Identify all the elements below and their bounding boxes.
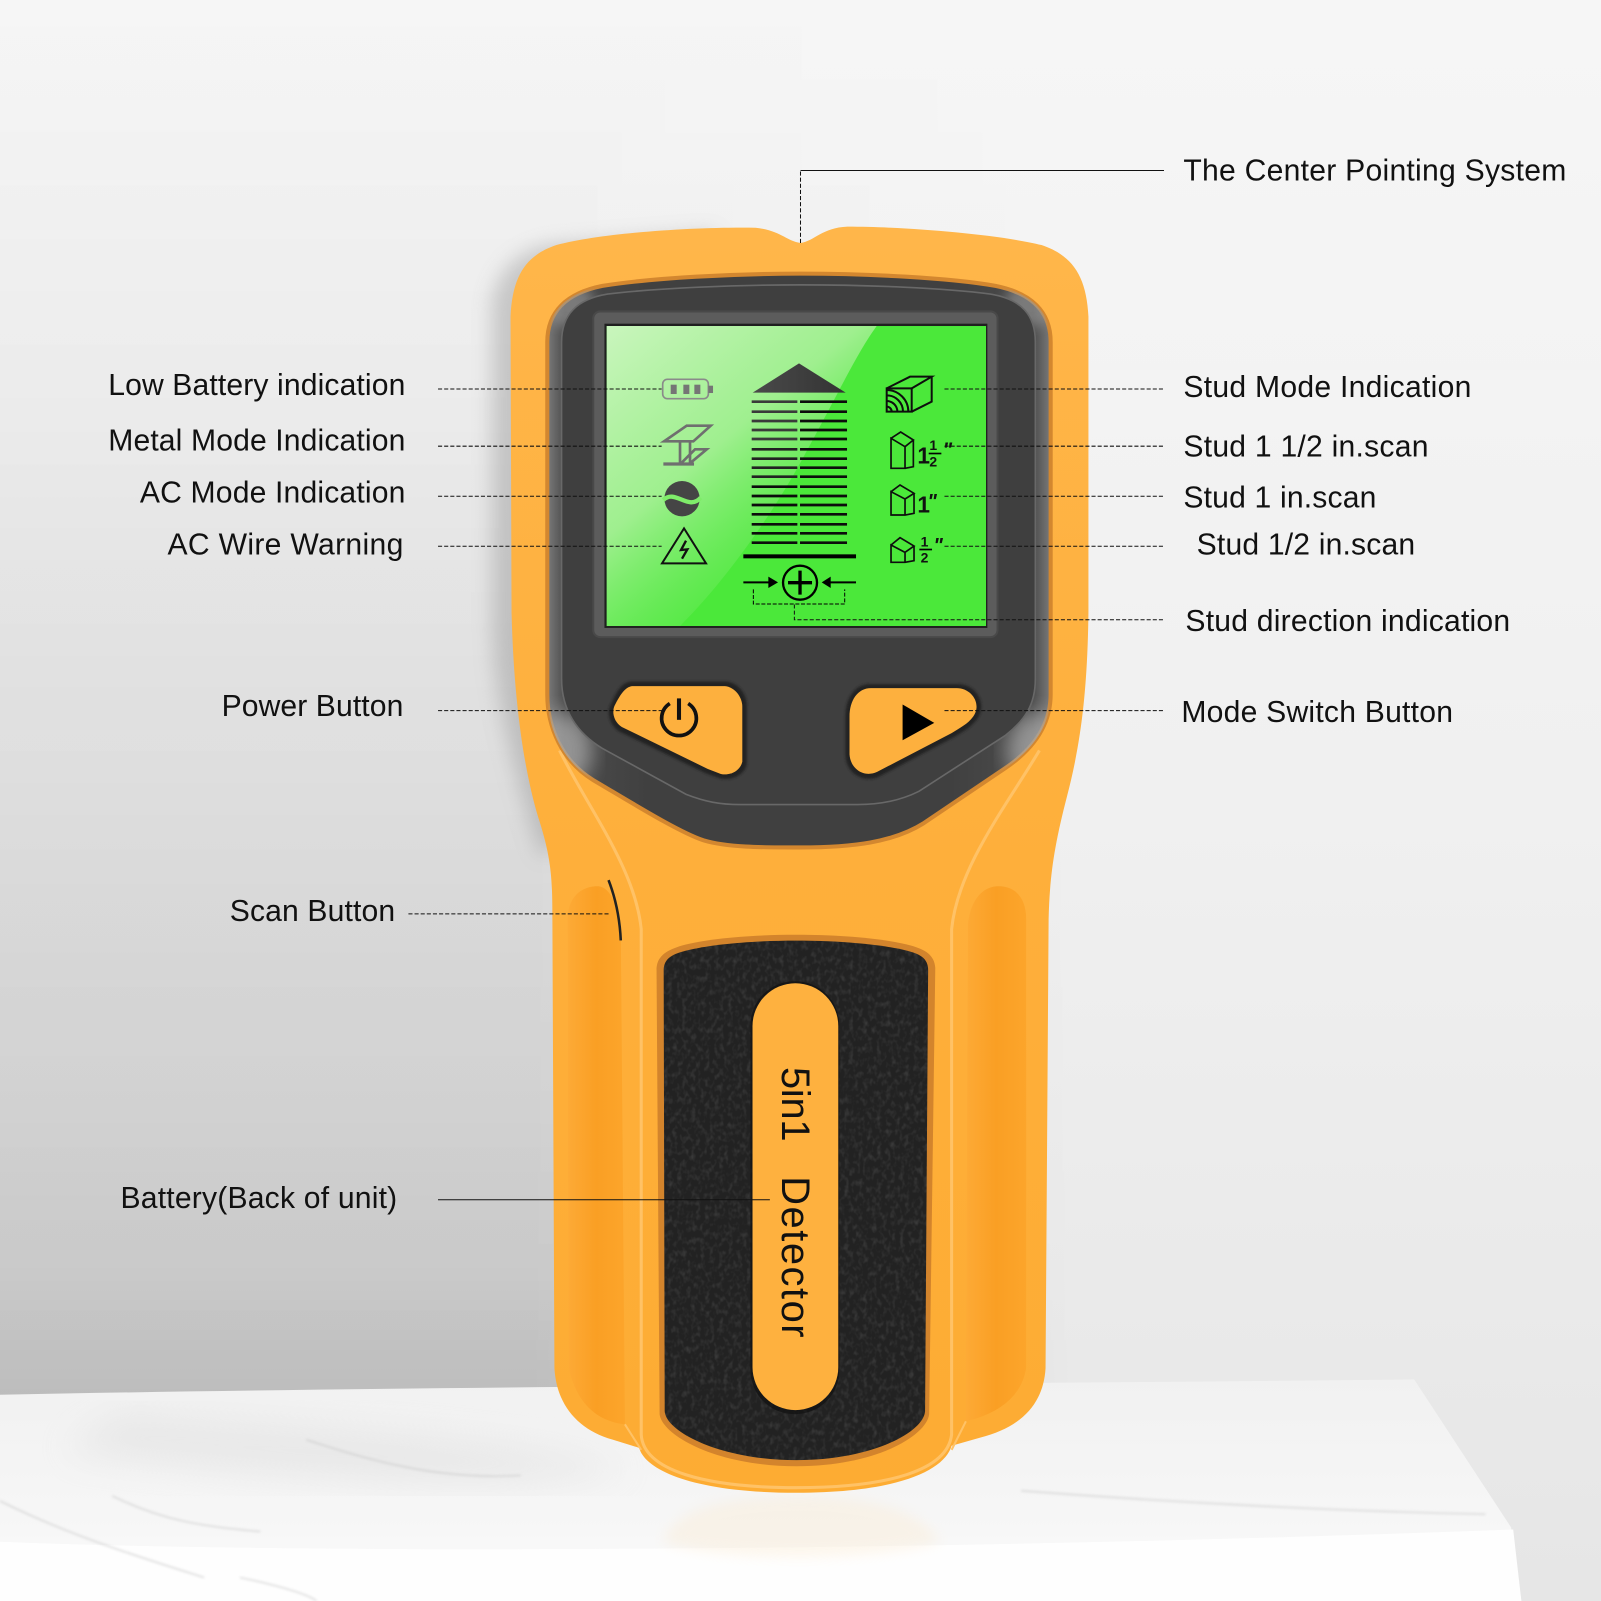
icon: stud 1 1/2 in: " — [943, 440, 953, 462]
icon: play triangle — [903, 705, 934, 740]
label: mode switch: Mode Switch Button — [1181, 696, 1453, 729]
left grip pad — [568, 886, 625, 1424]
icon: stud 1/2 in: " — [933, 535, 943, 557]
icon: stud 1/2 in: 1 — [921, 534, 929, 550]
icon: stud 1/2 in — [891, 534, 943, 566]
name plate — [750, 981, 839, 1414]
label: stud mode: Stud Mode Indication — [1183, 371, 1471, 404]
label: AC mode: AC Mode Indication — [140, 476, 405, 509]
label: stud 1: Stud 1 in.scan — [1183, 481, 1376, 514]
icon: stud 1 in: " — [927, 491, 937, 513]
icon: metal beam — [663, 426, 711, 464]
icon: power symbol — [662, 698, 696, 736]
label: low battery: Low Battery indication — [108, 369, 405, 402]
icon: stud 1 in: 1 — [917, 492, 930, 518]
scan button slit — [609, 880, 621, 940]
center target — [743, 566, 856, 604]
leader lines — [408, 171, 1164, 1200]
icon: stud 1 1/2 in: 2 — [929, 454, 937, 470]
product name: 5in1: 5in1 — [773, 1067, 817, 1142]
body contour lines — [560, 750, 1039, 1488]
device body — [511, 227, 1088, 1493]
stud detector device — [511, 227, 1088, 1493]
power button — [610, 683, 745, 777]
label: AC wire warning: AC Wire Warning — [167, 528, 403, 561]
icon: wood stud — [887, 377, 932, 412]
marble table — [0, 1379, 1521, 1601]
icon: AC wave — [663, 481, 701, 516]
label: metal mode: Metal Mode Indication — [108, 424, 405, 457]
icon: battery — [663, 379, 713, 399]
label: center pointing: The Center Pointing System — [1183, 155, 1566, 188]
label: stud 1/2: Stud 1/2 in.scan — [1197, 528, 1415, 561]
display bezel — [527, 274, 1072, 847]
device shadow on wall — [492, 233, 715, 858]
label: battery: Battery(Back of unit) — [120, 1182, 397, 1215]
label: stud direction: Stud direction indication — [1185, 605, 1510, 638]
mode switch button — [846, 685, 980, 778]
LCD screen — [607, 326, 986, 626]
depth bar graph — [743, 363, 856, 558]
background wall — [0, 536, 558, 1395]
icon: warning triangle — [662, 528, 706, 563]
icon: stud 1 1/2 in — [891, 432, 953, 470]
icon: stud 1/2 in: 2 — [921, 550, 929, 566]
product name: Detector: Detector — [773, 1176, 817, 1338]
icon: stud 1 1/2 in: 1 — [917, 443, 930, 469]
label: stud 1 1/2: Stud 1 1/2 in.scan — [1183, 430, 1428, 463]
right grip pad — [966, 886, 1026, 1421]
icon: stud 1 in — [891, 485, 937, 518]
icon: stud 1 1/2 in: 1 — [929, 437, 937, 453]
label: power button: Power Button — [222, 690, 403, 723]
grip panel — [657, 935, 935, 1466]
label: scan button: Scan Button — [230, 895, 395, 928]
